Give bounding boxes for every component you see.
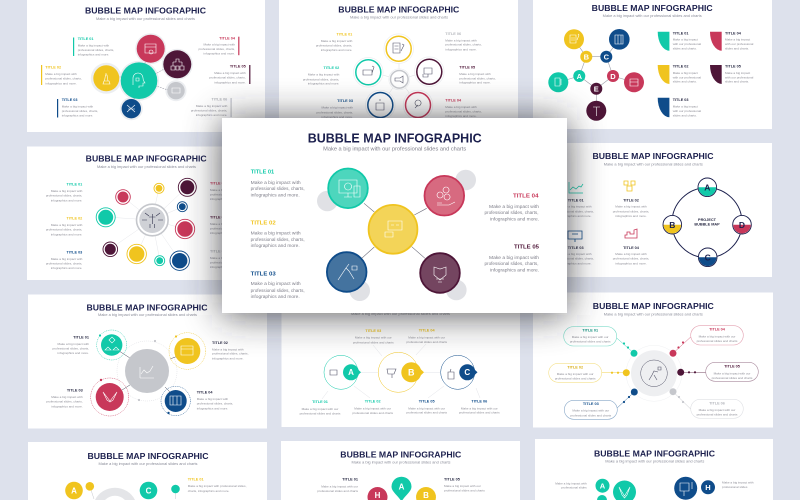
labels [46, 181, 227, 270]
panel: slide bottom middle: Make a big impact with our professional slides and charts [352, 461, 451, 465]
pill labels: Make a big impact with our [557, 372, 594, 376]
labels: Make a big impact with our [321, 485, 358, 489]
labels: professional slides, charts, [46, 400, 83, 404]
labels: TITLE 06 [210, 249, 226, 253]
outline icons and labels: Make a big impact with [615, 205, 647, 209]
panel: slide top right: BUBBLE MAP INFOGRAPHIC [592, 3, 713, 13]
labels left: Make a big impact with [45, 72, 77, 76]
labels: right column: professional slides, charts, [484, 261, 538, 266]
panel: slide middle left: Make a big impact with our professional slides and charts [97, 165, 196, 169]
labels left: infographics and more. [62, 114, 93, 118]
panel: slide lower right: Make a big impact with our professional slides and charts [604, 312, 703, 316]
pill labels: professional slides and charts [570, 413, 612, 417]
A B C process bubbles: C [464, 368, 470, 377]
outline icons and labels: professional slides, charts, [557, 209, 594, 213]
labels: professional slides [722, 485, 748, 489]
labels: left column: infographics and more. [251, 192, 300, 198]
pentagon bubble network [548, 29, 644, 121]
panel: main center slide [222, 118, 567, 313]
labels: professional slides, charts, [46, 262, 82, 266]
panel: slide bottom right: BUBBLE MAP INFOGRAPHIC [594, 448, 715, 458]
labels: Make a big impact with our [444, 484, 481, 488]
panel: slide middle left: BUBBLE MAP INFOGRAPHIC [86, 154, 207, 164]
labels: professional [210, 226, 227, 230]
labels: right column: infographics and more. [490, 268, 539, 272]
labels: infographics and more. [322, 115, 353, 119]
label list: TITLE 01 [673, 32, 689, 36]
pentagon bubble network: A [577, 72, 583, 81]
labels: infographics [210, 231, 227, 235]
labels: left column: infographics and more. [251, 294, 300, 299]
outline icons and labels: professional slides, charts, [613, 209, 649, 213]
pill labels: Make a big impact with our [714, 371, 750, 375]
labels: infographics and more. [51, 232, 82, 236]
panel: slide middle right: BUBBLE MAP INFOGRAPHIC [592, 151, 714, 161]
labels left: professional slides, charts, [62, 109, 98, 113]
label: TITLE 01 [188, 477, 204, 481]
labels: Make a big impact with [212, 347, 244, 351]
labels: TITLE 02 [323, 66, 339, 70]
panel: slide top middle: BUBBLE MAP INFOGRAPHIC [338, 5, 459, 15]
teardrop pins [368, 477, 436, 500]
labels: left column: infographics and more. [251, 243, 300, 248]
project ring diagram: BUBBLE MAP [694, 223, 720, 227]
labels right: professional slides, charts, [209, 76, 246, 80]
panel: slide top right: Make a big impact with our professional slides and charts [603, 14, 702, 18]
labels: TITLE 06 [471, 399, 487, 403]
outline icons and labels: infographics and more. [615, 214, 647, 218]
dashed orbit bubbles [91, 330, 206, 416]
labels: professional slides, charts, [459, 76, 496, 80]
panel: slide top middle [279, 0, 518, 120]
labels left: TITLE 01 [78, 37, 94, 41]
labels: professional slides and charts [300, 411, 341, 415]
label list: slides and charts. [673, 80, 697, 84]
label: charts, infographics and more. [188, 489, 230, 493]
outline icons and labels: infographics and more. [560, 214, 592, 218]
outline icons and labels: TITLE 02 [623, 198, 639, 202]
outline icons and labels: Make a big impact with [615, 252, 647, 256]
outline icons and labels: TITLE 01 [568, 198, 584, 202]
labels: infographics and more. [459, 81, 491, 85]
label list: with our professional [673, 109, 701, 113]
labels: Make a big impact with our [354, 407, 391, 411]
pill labels: professional slides and charts [570, 340, 611, 344]
outline icons and labels [557, 181, 649, 265]
labels: Make a big impact with our [408, 406, 445, 410]
labels right: infographics and more. [204, 52, 235, 56]
labels: TITLE 01 [66, 182, 82, 186]
labels: right column: Make a big impact with [489, 255, 540, 260]
pill labels: Make a big impact with our [572, 335, 609, 339]
pentagon bubble network: E [594, 84, 599, 94]
label list: TITLE 02 [673, 65, 689, 69]
labels: Make a big impact with [51, 257, 83, 261]
label list: Make a big impact [673, 71, 698, 75]
panel: slide bottom middle [281, 441, 520, 500]
project ring diagram: A [704, 183, 710, 193]
pill labels: professional slides and charts [697, 413, 738, 417]
bubble pins [65, 482, 180, 500]
labels [317, 478, 485, 493]
labels: Make a big impact with our [302, 407, 338, 411]
labels: Make a big impact with [308, 73, 340, 77]
labels: professional slides, charts, [46, 228, 82, 232]
outline icons and labels: infographics and more. [560, 261, 592, 265]
A B C process bubbles [322, 344, 480, 399]
labels: infographics and more. [321, 48, 352, 52]
labels left: TITLE 02 [45, 65, 61, 69]
labels: TITLE 04 [445, 98, 462, 102]
labels: professional slides, charts, [53, 346, 89, 350]
labels: TITLE 04 [197, 391, 213, 395]
ring bubbles [354, 34, 444, 120]
label list: slides and charts. [725, 47, 749, 51]
pentagon bubble network: B [584, 52, 590, 62]
labels: professional slides and charts [317, 489, 358, 493]
label list: with our professional [673, 42, 701, 46]
pill labels [549, 326, 758, 419]
labels: TITLE 05 [210, 215, 226, 219]
labels: TITLE 01 [312, 400, 328, 404]
labels: right column: professional slides, charts, [484, 210, 538, 215]
labels: Make a big impact with [51, 189, 83, 193]
label list: slides and charts. [725, 80, 749, 84]
outline icons and labels: professional slides, charts, [613, 257, 649, 261]
labels right [191, 36, 250, 117]
labels: professional slides [561, 486, 587, 490]
labels: Make a big impact with our [461, 406, 498, 410]
labels: infographics and more. [51, 198, 82, 202]
labels right: TITLE 06 [211, 97, 227, 101]
label list: Make a big impact [673, 104, 698, 108]
pill labels: TITLE 05 [724, 365, 740, 369]
labels: Make a big impact with [321, 39, 353, 43]
labels right: infographics and more. [196, 113, 227, 117]
labels: infographics and more. [445, 114, 477, 118]
label [188, 477, 247, 493]
bubble: yellow center [369, 205, 417, 254]
labels: Make a big impact with [51, 395, 83, 399]
panel: slide lower left: Make a big impact with our professional slides and charts [98, 313, 197, 317]
labels: left column [251, 169, 305, 299]
label list: with our professional [725, 42, 754, 46]
labels: TITLE 05 [444, 478, 460, 482]
labels left: professional slides, charts, [45, 77, 82, 81]
labels: TITLE 06 [445, 32, 461, 36]
labels: TITLE 05 [419, 399, 435, 403]
panel: slide lower middle: Make a big impact with our professional slides and charts [351, 312, 450, 316]
outline icons and labels: TITLE 03 [568, 246, 584, 250]
label list: Make a big impact [725, 38, 750, 42]
labels: left column: TITLE 01 [251, 169, 275, 175]
bubble: purple [420, 253, 460, 293]
label list: with our professional [725, 75, 754, 79]
label list: TITLE 05 [725, 65, 741, 69]
labels: left column: professional slides, charts, [251, 186, 305, 191]
radial bubble map [96, 178, 196, 270]
panel: slide lower right [533, 292, 773, 428]
labels: infographics [210, 197, 227, 201]
labels: professional slides and charts [406, 340, 448, 344]
labels: professional slides, charts, [445, 43, 482, 47]
labels: Make a big impact with [555, 482, 587, 486]
labels: TITLE 01 [342, 478, 358, 482]
labels: infographics and more. [308, 82, 339, 86]
label list: slides and charts. [673, 114, 697, 118]
labels: Make a big impact with [197, 397, 228, 401]
outline icons and labels: TITLE 04 [623, 246, 640, 250]
labels [46, 335, 249, 410]
title: BUBBLE MAP INFOGRAPHIC [308, 130, 482, 146]
outline icons and labels: infographics and more. [615, 261, 647, 265]
labels: TITLE 02 [365, 400, 381, 404]
panel: slide bottom left [28, 442, 267, 500]
bubble: blue [327, 252, 367, 292]
bubble: red [424, 176, 464, 216]
pill labels: Make a big impact with our [572, 409, 609, 413]
labels right: TITLE 04 [219, 36, 236, 40]
labels: right column [484, 194, 540, 272]
labels: right column: TITLE 05 [514, 245, 540, 251]
outline icons and labels: Make a big impact with [560, 205, 592, 209]
pill labels: Make a big impact with our [699, 334, 735, 338]
teardrop pins: A [399, 482, 405, 492]
panel: slide lower right: BUBBLE MAP INFOGRAPHIC [593, 301, 714, 311]
label list: with our professional [673, 75, 701, 79]
labels right: Make a big impact with [196, 104, 228, 108]
labels left [41, 37, 114, 118]
labels: professional slides, charts, [46, 194, 82, 198]
labels: Make a big impact with [722, 481, 754, 485]
labels: TITLE 03 [66, 250, 82, 254]
pill labels: professional slides and charts [697, 339, 738, 343]
panel: slide bottom right: Make a big impact with our professional slides and charts [605, 459, 705, 463]
labels: professional slides, charts, [317, 110, 353, 114]
panel: slide top middle: Make a big impact with our professional slides and charts [350, 16, 448, 20]
pill labels: professional slides and charts [712, 376, 753, 380]
labels: TITLE 04 [419, 329, 435, 333]
pill labels: TITLE 06 [709, 401, 725, 405]
pill labels: TITLE 01 [582, 328, 598, 332]
labels: infographics and more. [212, 356, 244, 360]
pill labels: Make a big impact with our [699, 408, 735, 412]
labels: TITLE 03 [67, 388, 83, 392]
label list: TITLE 03 [673, 98, 689, 102]
bubble map [317, 168, 476, 301]
labels: professional slides, charts, [445, 110, 482, 114]
labels: Make a big impact with [322, 106, 353, 110]
labels: Make a big impact with [445, 38, 477, 42]
labels: Make a big impact with [445, 105, 477, 109]
label: Make a big impact with professional slides, [188, 484, 247, 488]
panel: slide top left: Make a big impact with our professional slides and charts [96, 17, 195, 21]
bubble pins: C [146, 486, 152, 495]
labels: infographics and more. [58, 351, 89, 355]
labels: Make a big impact with our [408, 336, 445, 340]
labels: left column: TITLE 03 [251, 271, 276, 277]
A B C process bubbles: A [348, 368, 354, 377]
labels: right column: TITLE 04 [513, 194, 539, 200]
labels: left column: professional slides, charts, [251, 237, 305, 242]
labels: left column: professional slides, charts, [251, 288, 305, 293]
subtitle: Make a big impact with our professional slides and charts [323, 146, 467, 152]
labels left: infographics and more. [45, 81, 77, 85]
labels: infographics and more. [197, 406, 228, 410]
labels: professional [210, 260, 227, 264]
panel: slide bottom left: Make a big impact with our professional slides and charts [98, 462, 198, 466]
labels: TITLE 01 [73, 335, 89, 339]
panel: slide bottom left: BUBBLE MAP INFOGRAPHIC [88, 451, 208, 461]
center slide shadow [222, 120, 567, 315]
A B C process bubbles: B [408, 368, 415, 378]
labels: professional slides and charts [353, 340, 394, 344]
label list: Make a big impact [725, 71, 750, 75]
panel: slide middle left [27, 146, 266, 280]
teardrop pins: B [423, 491, 429, 500]
project ring diagram: B [669, 220, 675, 230]
hub and spoke [602, 337, 706, 409]
project ring diagram [663, 178, 751, 267]
labels: infographics and more. [445, 47, 477, 51]
labels left: professional slides, charts, [78, 48, 114, 52]
labels: Make a big impact with [459, 72, 491, 76]
panel: slide bottom right [535, 439, 773, 500]
labels left: TITLE 03 [62, 98, 78, 102]
pentagon bubble network: D [610, 72, 616, 81]
pill labels: TITLE 04 [709, 328, 726, 332]
panel: slide top right [533, 0, 772, 129]
labels: professional slides, charts, [197, 402, 233, 406]
labels: left column: Make a big impact with [251, 230, 301, 236]
labels: infographics and more. [51, 404, 83, 408]
lettered bubbles [596, 477, 715, 500]
labels: infographics and more. [51, 266, 82, 270]
labels: Make a big [210, 222, 225, 226]
labels: professional slides and charts [352, 411, 394, 415]
panel: slide top left: BUBBLE MAP INFOGRAPHIC [85, 5, 206, 15]
labels right: TITLE 05 [230, 64, 246, 68]
label list: slides and charts. [673, 47, 697, 51]
labels right: professional slides, charts, [191, 108, 227, 112]
pill labels: TITLE 03 [583, 402, 599, 406]
labels: TITLE 02 [212, 341, 228, 345]
labels: professional slides, charts, [316, 44, 352, 48]
labels: professional slides and charts [406, 411, 448, 415]
panel: slide lower middle [282, 300, 520, 427]
labels: professional slides, charts, [212, 352, 249, 356]
labels: TITLE 04 [210, 181, 227, 185]
bubble: teal [328, 168, 368, 208]
pill labels: TITLE 02 [567, 365, 583, 369]
labels: Make a big [210, 188, 225, 192]
lettered bubbles: A [600, 482, 606, 490]
pentagon bubble network: C [604, 52, 610, 62]
lettered bubbles: H [705, 483, 711, 492]
labels: professional slides and charts [459, 411, 500, 415]
outline icons and labels: Make a big impact with [560, 252, 592, 256]
label list [658, 32, 754, 118]
panel: slide middle right: Make a big impact with our professional slides and charts [604, 162, 703, 166]
labels: professional slides and charts [444, 488, 485, 492]
labels: TITLE 03 [337, 99, 353, 103]
bubble cluster [91, 33, 193, 120]
labels: right column: Make a big impact with [489, 204, 540, 209]
label list: TITLE 04 [725, 32, 742, 36]
labels right: Make a big impact with [204, 43, 235, 47]
labels: Make a big impact with [58, 342, 89, 346]
label list: Make a big impact [673, 38, 698, 42]
labels: left column: TITLE 02 [251, 220, 276, 226]
labels: Make a big impact with [51, 223, 83, 227]
labels right: Make a big impact with [214, 71, 246, 75]
labels: professional slides, charts, [303, 77, 339, 81]
labels: infographics [210, 265, 227, 269]
labels [303, 32, 496, 119]
panel: slide top left [27, 0, 265, 132]
bubble pins: A [71, 486, 77, 495]
labels: TITLE 02 [66, 216, 82, 220]
panel: slide lower left: BUBBLE MAP INFOGRAPHIC [86, 302, 208, 312]
panel: slide bottom middle: BUBBLE MAP INFOGRAPHIC [340, 450, 461, 460]
project ring diagram: C [705, 253, 711, 263]
labels: TITLE 01 [336, 33, 352, 37]
labels: professional [210, 192, 227, 196]
labels right: infographics and more. [214, 80, 246, 84]
labels: left column: Make a big impact with [251, 180, 301, 185]
project ring diagram: PROJECT [698, 218, 717, 222]
outline icons and labels: professional slides, charts, [557, 257, 594, 261]
labels right: professional slides, charts, [199, 47, 235, 51]
labels: Make a big [210, 256, 225, 260]
labels: TITLE 05 [459, 65, 475, 69]
labels left: infographics and more. [78, 53, 109, 57]
labels [555, 481, 754, 490]
project ring diagram: D [739, 220, 745, 230]
labels: Make a big impact with our [355, 336, 392, 340]
labels: right column: infographics and more. [490, 216, 539, 222]
labels [300, 329, 500, 415]
teardrop pins: H [375, 491, 381, 500]
labels left: Make a big impact with [62, 105, 93, 109]
labels: TITLE 03 [365, 329, 381, 333]
labels: left column: Make a big impact with [251, 281, 301, 286]
labels left: Make a big impact with [78, 43, 109, 47]
panel: slide lower left [28, 294, 267, 428]
pill labels: professional slides and charts [555, 377, 596, 381]
panel: slide middle right [530, 143, 772, 277]
